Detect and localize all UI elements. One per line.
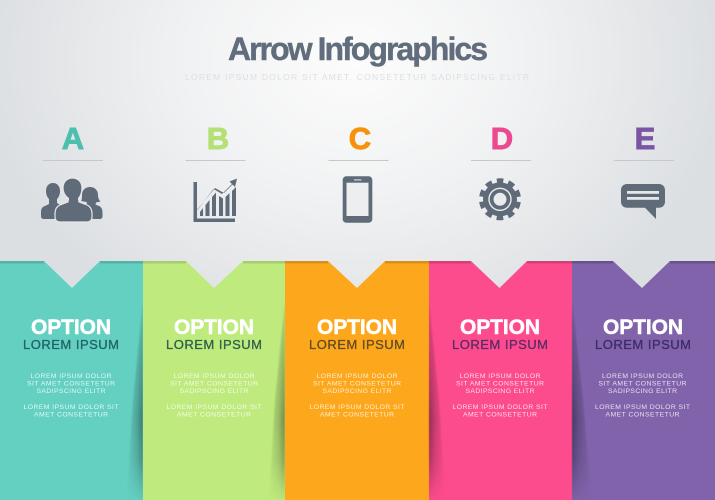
header column D xyxy=(471,121,531,218)
body text: LOREM IPSUM DOLOR SIT xyxy=(24,404,118,411)
subtitle: LOREM IPSUM DOLOR SIT AMET, CONSETETUR SADIPSCING ELITR xyxy=(185,72,529,82)
panel: option B xyxy=(143,261,285,500)
body text: LOREM IPSUM DOLOR xyxy=(30,373,112,380)
title: Arrow Infographics xyxy=(228,31,488,67)
body text: LOREM IPSUM DOLOR SIT xyxy=(452,404,548,411)
panel: option A xyxy=(0,261,143,500)
body text xyxy=(310,373,404,418)
panel: option C xyxy=(285,261,429,500)
body text: AMET CONSETETUR xyxy=(34,412,108,418)
letter B: B xyxy=(207,121,229,156)
background panel xyxy=(0,0,715,300)
body text: SIT AMET CONSETETUR xyxy=(598,380,687,388)
heading: OPTION xyxy=(31,316,111,339)
body text xyxy=(452,373,548,418)
header column C xyxy=(328,121,388,223)
body text xyxy=(24,373,118,418)
body text: LOREM IPSUM DOLOR xyxy=(602,373,683,380)
body text xyxy=(166,373,262,418)
body text: AMET CONSETETUR xyxy=(606,412,680,418)
body text: SIT AMET CONSETETUR xyxy=(170,380,258,388)
panel: option E: LOREM IPSUM xyxy=(595,337,691,352)
panel: option C: LOREM IPSUM xyxy=(309,337,405,352)
body text: SADIPSCING ELITR xyxy=(466,388,535,395)
icon: smartphone xyxy=(343,176,372,223)
icon: growth chart xyxy=(194,178,237,222)
panel: option D xyxy=(429,261,572,500)
body text: LOREM IPSUM DOLOR xyxy=(316,373,398,380)
letter E: E xyxy=(635,121,655,156)
body text: AMET CONSETETUR xyxy=(320,412,394,418)
body text: LOREM IPSUM DOLOR xyxy=(460,373,541,380)
body text: LOREM IPSUM DOLOR SIT xyxy=(166,404,262,411)
heading: OPTION xyxy=(317,316,397,339)
body text: AMET CONSETETUR xyxy=(463,412,537,418)
body text: AMET CONSETETUR xyxy=(177,412,251,418)
panel: option D: LOREM IPSUM xyxy=(452,337,548,352)
body text: LOREM IPSUM DOLOR SIT xyxy=(310,404,404,411)
body text: SIT AMET CONSETETUR xyxy=(27,380,115,388)
icon: gear xyxy=(482,181,518,218)
panel: option E xyxy=(572,261,715,500)
letter C: C xyxy=(349,121,371,156)
body text: SADIPSCING ELITR xyxy=(608,388,677,395)
header column A xyxy=(41,121,103,222)
heading: OPTION xyxy=(460,316,540,339)
body text: SADIPSCING ELITR xyxy=(322,388,392,395)
icon: speech bubble xyxy=(621,184,665,219)
body text: SADIPSCING ELITR xyxy=(180,388,249,395)
header column B xyxy=(186,121,246,222)
body text: SIT AMET CONSETETUR xyxy=(313,380,401,388)
letter D: D xyxy=(491,121,513,156)
body text: SIT AMET CONSETETUR xyxy=(456,380,544,388)
body text: LOREM IPSUM DOLOR xyxy=(174,373,255,380)
icon: people group xyxy=(41,178,102,222)
header column E xyxy=(614,121,674,219)
heading: OPTION xyxy=(603,316,683,339)
panel: option B: LOREM IPSUM xyxy=(166,337,262,352)
body text xyxy=(595,373,690,418)
panel: option A: LOREM IPSUM xyxy=(23,337,119,352)
heading: OPTION xyxy=(174,316,254,339)
body text: SADIPSCING ELITR xyxy=(36,388,106,395)
letter A: A xyxy=(62,121,84,156)
body text: LOREM IPSUM DOLOR SIT xyxy=(595,404,690,411)
